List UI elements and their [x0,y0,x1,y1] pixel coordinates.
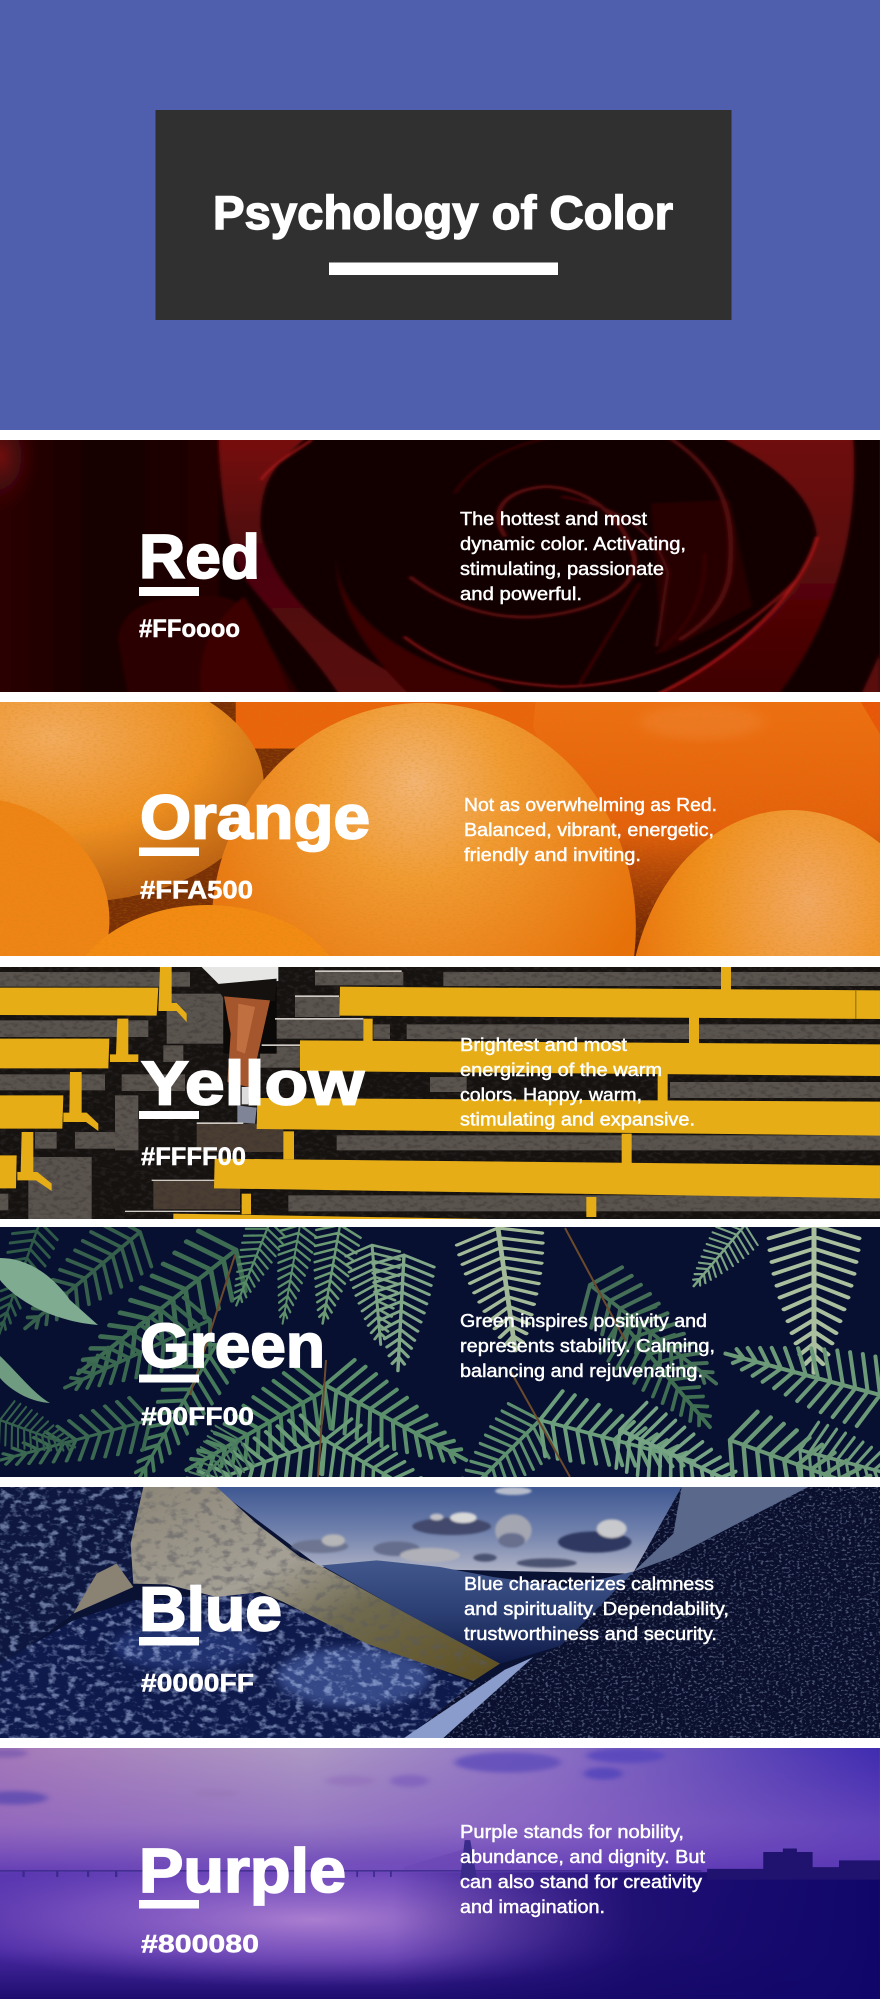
heading: Green [140,1312,325,1381]
description: stimulating and expansive. [460,1110,695,1130]
photo: fern fronds [0,1227,880,1477]
hex code: #FFFF00 [141,1143,246,1171]
title: Psychology of Color [213,186,673,239]
photo: yellow stadium benches [0,967,880,1222]
hex code: #FFA500 [140,876,253,904]
hex code: #FFoooo [139,615,240,643]
description: Not as overwhelming as Red. [464,795,717,815]
panel: red [0,440,880,692]
heading: Purple [139,1837,346,1906]
description [460,1311,715,1381]
description: dynamic color. Activating, [460,534,686,554]
title underline [329,262,558,275]
description: energizing of the warm [460,1060,662,1080]
heading underline [139,1111,199,1119]
description: Balanced, vibrant, energetic, [464,820,714,840]
heading underline [139,1637,199,1646]
description: Green inspires positivity and [460,1311,707,1331]
panel: green [0,1227,880,1477]
description: represents stability. Calming, [460,1336,715,1356]
heading underline [139,848,199,856]
photo: oranges [0,702,880,956]
panel: orange [0,702,880,956]
description: and spirituality. Dependability, [464,1599,729,1619]
description: stimulating, passionate [460,559,664,579]
description: friendly and inviting. [464,845,641,865]
description: The hottest and most [460,509,647,529]
description: and imagination. [460,1897,605,1917]
description [460,509,686,604]
photo: mountains [0,1487,880,1740]
hex code: #0000FF [141,1670,254,1698]
description: abundance, and dignity. But [460,1847,705,1867]
heading: Yellow [141,1050,365,1118]
person [202,967,278,1124]
description [460,1035,695,1130]
heading underline [139,1374,199,1382]
hex code: #800080 [141,1930,259,1958]
panel: header [0,0,880,430]
description: colors. Happy, warm, [460,1085,642,1105]
description: balancing and rejuvenating. [460,1361,703,1381]
heading: Orange [140,784,370,852]
description [460,1822,705,1917]
photo: purple sea at dusk [0,1745,880,2000]
description [464,1574,729,1644]
description: Brightest and most [460,1035,627,1055]
panel: purple [0,1745,880,2000]
panel: yellow [0,967,880,1222]
panel: blue [0,1487,880,1740]
heading: Blue [139,1576,282,1644]
title box [156,110,732,320]
heading underline [139,587,199,596]
heading: Red [139,523,260,592]
photo: red rose [0,440,880,692]
description: and powerful. [460,584,582,604]
description: Purple stands for nobility, [460,1822,684,1842]
description [464,795,717,865]
hex code: #00FF00 [141,1403,254,1431]
description: Blue characterizes calmness [464,1574,714,1594]
heading underline [139,1900,199,1908]
description: trustworthiness and security. [464,1624,717,1644]
description: can also stand for creativity [460,1872,702,1892]
